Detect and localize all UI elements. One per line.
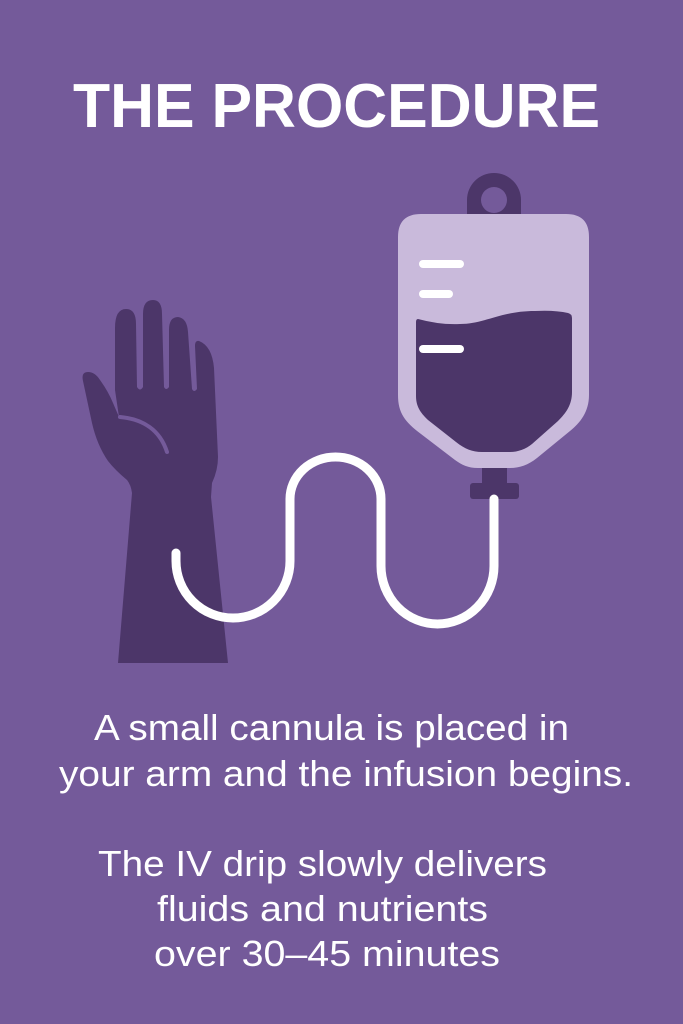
text block: IV drip: over 30–45 minutes bbox=[154, 933, 500, 974]
text block: cannula: your arm and the infusion begins. bbox=[59, 753, 633, 794]
measurement mark bottom bbox=[419, 345, 464, 353]
fluid level bbox=[416, 311, 572, 452]
bag hanger bbox=[467, 173, 521, 214]
icon: IV bag bbox=[398, 173, 589, 499]
text block: IV drip bbox=[98, 843, 547, 974]
measurement mark middle bbox=[419, 290, 453, 298]
palm crease bbox=[120, 417, 167, 452]
bag body bbox=[398, 214, 589, 468]
drip connector bbox=[470, 483, 519, 499]
text block: cannula: A small cannula is placed in bbox=[94, 707, 569, 748]
IV tube bbox=[176, 457, 494, 624]
text block: cannula bbox=[59, 707, 633, 794]
text block: IV drip: fluids and nutrients bbox=[157, 888, 488, 929]
bag neck bbox=[482, 468, 507, 486]
measurement mark top bbox=[419, 260, 464, 268]
text block: IV drip: The IV drip slowly delivers bbox=[98, 843, 547, 884]
title: THE PROCEDURE bbox=[73, 72, 600, 141]
icon: hand and arm bbox=[83, 300, 228, 663]
